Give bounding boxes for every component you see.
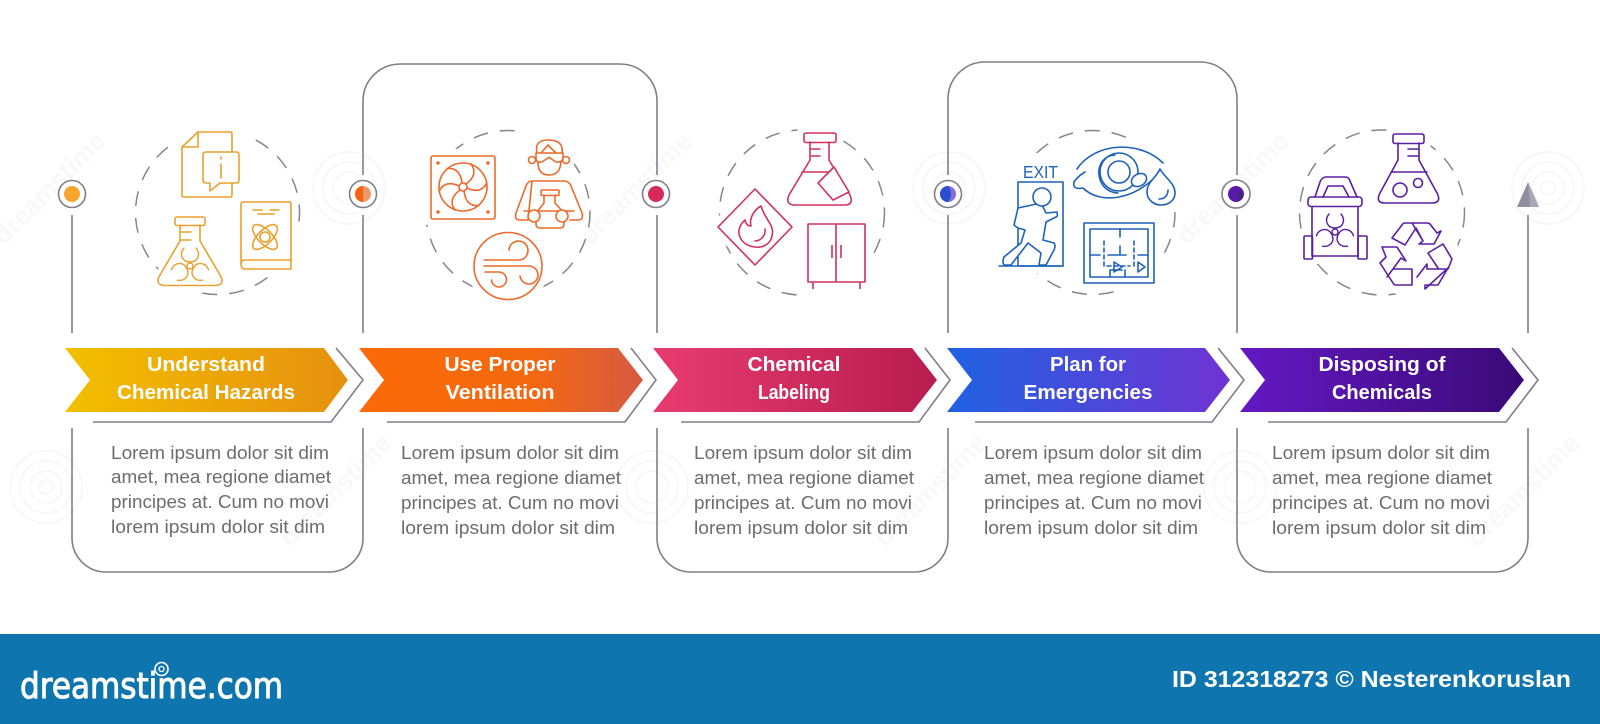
text block: step 4: amet, mea regione diamet (984, 467, 1204, 488)
text block: step 1: amet, mea regione diamet (111, 466, 331, 487)
chevron: Chemical Labeling: Chemical (748, 354, 840, 376)
watermark spirals and text: dreamstime (1461, 428, 1585, 552)
icon: exit door with running person (999, 162, 1063, 266)
chevron: Understand Chemical Hazards: Chemical Hazards (117, 382, 295, 404)
chevron: Disposing of Chemicals (1240, 348, 1538, 422)
icon: science book (241, 202, 291, 269)
chevron: Disposing of Chemicals: Chemicals (1332, 382, 1432, 404)
text block: step 3: amet, mea regione diamet (694, 467, 914, 488)
watermark spirals and text: dreamstime (1170, 126, 1294, 250)
text block: step 3: Lorem ipsum dolor sit dim (694, 442, 912, 463)
chevron: Plan for Emergencies: Plan for (1050, 354, 1126, 376)
text block: step 1: Lorem ipsum dolor sit dim (111, 442, 329, 463)
icon: flask with bubbles (1378, 134, 1439, 203)
text block: step 4: principes at. Cum no movi (984, 492, 1202, 513)
text block: step 5: lorem ipsum dolor sit dim (1272, 517, 1486, 538)
text block: step 4 (984, 442, 1204, 538)
watermark spirals and text: dreamstime (273, 428, 397, 552)
text block: step 2: principes at. Cum no movi (401, 492, 619, 513)
chevron: Use Proper Ventilation: Use Proper (444, 354, 556, 376)
text block: step 2 (401, 442, 621, 538)
icon: exit door with running person: EXIT (1023, 162, 1058, 182)
dashed circle: step 4 (1011, 130, 1175, 294)
marker: step 1 (58, 180, 86, 208)
watermark spirals and text: dreamstime (573, 126, 697, 250)
icon group: ventilation (431, 140, 582, 300)
icon: biohazard flask (158, 217, 222, 286)
icon group: emergencies (999, 147, 1175, 283)
chevron: Chemical Labeling (653, 348, 950, 422)
icon group: disposal (1304, 134, 1452, 289)
marker: step 3 (642, 180, 670, 208)
timeline frame outlines (72, 62, 1528, 572)
footer credit: ID 312318273 © Nesterenkoruslan (1172, 666, 1571, 692)
text block: step 3 (694, 442, 914, 538)
chevron: Plan for Emergencies (947, 348, 1244, 422)
dashed circle: step 5 (1300, 130, 1464, 295)
dashed circle: step 2 (426, 130, 590, 294)
icon: recycling arrows (1380, 223, 1452, 289)
chevron: Understand Chemical Hazards (65, 348, 363, 422)
text block: step 5: Lorem ipsum dolor sit dim (1272, 442, 1490, 463)
icon: flammable diamond sign (718, 189, 792, 265)
text block: step 2: amet, mea regione diamet (401, 467, 621, 488)
chevron: Understand Chemical Hazards: Understand (147, 354, 265, 376)
text block: step 3: principes at. Cum no movi (694, 492, 912, 513)
text block: step 4: lorem ipsum dolor sit dim (984, 517, 1198, 538)
text block: step 2: lorem ipsum dolor sit dim (401, 517, 615, 538)
icon: evacuation floor plan (1084, 223, 1154, 283)
text block: step 3: lorem ipsum dolor sit dim (694, 517, 908, 538)
chevron: Plan for Emergencies: Emergencies (1024, 382, 1152, 404)
icon: person with goggles holding flask (516, 140, 582, 228)
icon: labeled flask (788, 133, 851, 205)
marker: end triangle (1517, 182, 1539, 207)
text block: step 1: lorem ipsum dolor sit dim (111, 516, 325, 537)
icon group: chemical hazards (158, 132, 291, 286)
icon: wind in circle (474, 232, 542, 300)
icon: eye with tear drop (1074, 147, 1175, 205)
footer banner (0, 634, 1600, 724)
dashed circle: step 3 (720, 130, 884, 295)
watermark spirals and text: dreamstime (868, 428, 992, 552)
icon group: chemical labeling (718, 133, 865, 289)
icon: biohazard bin (1304, 177, 1367, 259)
text block: step 1 (111, 442, 331, 537)
icon: exhaust fan (431, 156, 495, 219)
icon: storage cabinet (808, 224, 865, 289)
text block: step 5: principes at. Cum no movi (1272, 492, 1490, 513)
icon: document with info bubble (182, 132, 239, 197)
dashed circle: step 1 (136, 130, 300, 294)
chevron: Use Proper Ventilation (359, 348, 656, 422)
text block: step 2: Lorem ipsum dolor sit dim (401, 442, 619, 463)
footer logo: dreamstime.com (20, 666, 283, 707)
text block: step 4: Lorem ipsum dolor sit dim (984, 442, 1202, 463)
chevron: Use Proper Ventilation: Ventilation (446, 382, 554, 404)
chevron: Disposing of Chemicals: Disposing of (1318, 354, 1446, 376)
text block: step 1: principes at. Cum no movi (111, 491, 329, 512)
text block: step 5 (1272, 442, 1492, 538)
marker: step 5 (1222, 180, 1250, 208)
chevron: Chemical Labeling: Labeling (758, 382, 830, 404)
watermark spirals and text (0, 126, 1585, 552)
marker: step 4 (934, 180, 962, 208)
marker: step 2 (350, 180, 376, 208)
text block: step 5: amet, mea regione diamet (1272, 467, 1492, 488)
